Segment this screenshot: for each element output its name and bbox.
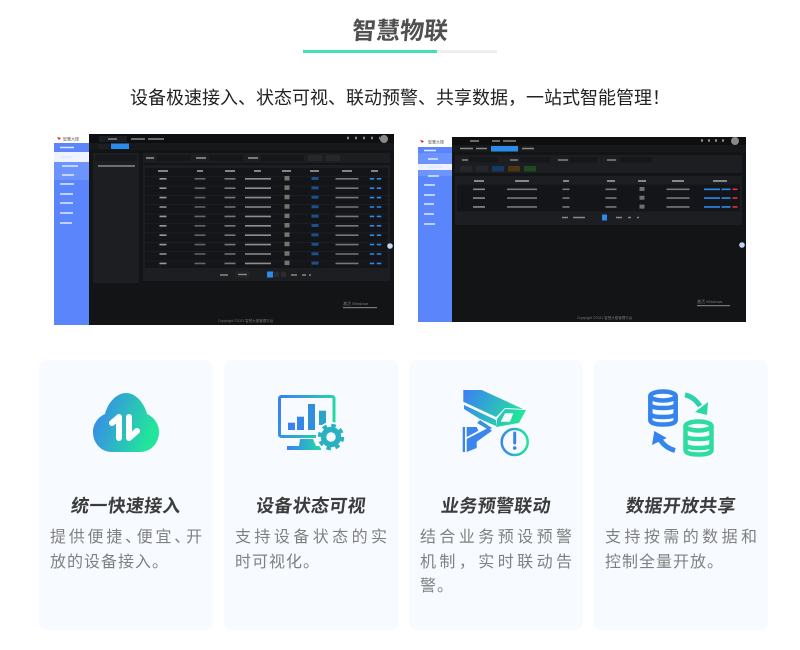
top bar: [452, 137, 746, 152]
card description: [50, 528, 205, 570]
card description: 放的设备接入。: [50, 554, 169, 570]
organization tree panel: [93, 153, 139, 283]
icon: two databases with exchange arrows: [648, 389, 714, 457]
top bar: [89, 134, 394, 150]
sidebar: [418, 137, 452, 322]
card heading: 设备状态可视: [255, 496, 367, 516]
card description: 时可视化。: [235, 554, 320, 570]
filter panel: [455, 155, 742, 173]
activation watermark: 激活 Windows: [343, 300, 368, 306]
card description: 警。: [420, 578, 454, 595]
title: 智慧物联: [351, 18, 449, 45]
title underline: [303, 50, 497, 53]
card description: 结合业务预设预警: [420, 529, 575, 546]
sidebar: 智慧大楼: [428, 138, 444, 144]
card description: 控制全量开放。: [605, 554, 724, 570]
card description: [605, 528, 760, 570]
footer: Copyright ©2021 智慧大楼管理平台: [577, 315, 633, 320]
subtitle: 设备极速接入、状态可视、联动预警、共享数据，一站式智能管理！: [130, 88, 670, 108]
device table: [455, 176, 742, 225]
card description: [420, 528, 575, 595]
card description: 机制，实时联动告: [420, 554, 575, 570]
card description: 提供便捷、便宜、开: [50, 529, 205, 546]
activation watermark: [697, 298, 730, 306]
panel: device status visualization: [224, 360, 398, 630]
icon: cloud with up and down arrows: [93, 393, 159, 452]
panel: open data sharing: [594, 360, 768, 630]
card heading: 数据开放共享: [625, 496, 737, 516]
sidebar: 智慧大楼: [63, 136, 79, 142]
help bubble: [739, 242, 745, 248]
screenshot: device access dashboard: [418, 137, 746, 322]
panel: unified fast access: [39, 360, 213, 630]
icon: surveillance camera with alert: [462, 390, 529, 456]
sidebar: [54, 134, 89, 325]
card heading: 统一快速接入: [70, 496, 182, 516]
panel: business alert linkage: [409, 360, 583, 630]
staff data table: [143, 165, 390, 281]
screenshot: personnel management dashboard: [54, 134, 394, 325]
filter bar: [143, 153, 390, 163]
card description: 支持设备状态的实: [235, 529, 390, 546]
icon: monitor with bars and gear: [278, 395, 344, 450]
activation watermark: [343, 300, 377, 308]
activation watermark: 激活 Windows: [697, 298, 722, 304]
card heading: 业务预警联动: [440, 496, 552, 516]
footer: Copyright ©2021 智慧大楼管理平台: [218, 318, 274, 323]
card description: [235, 528, 390, 570]
card description: 支持按需的数据和: [605, 529, 760, 546]
help bubble: [387, 243, 393, 249]
